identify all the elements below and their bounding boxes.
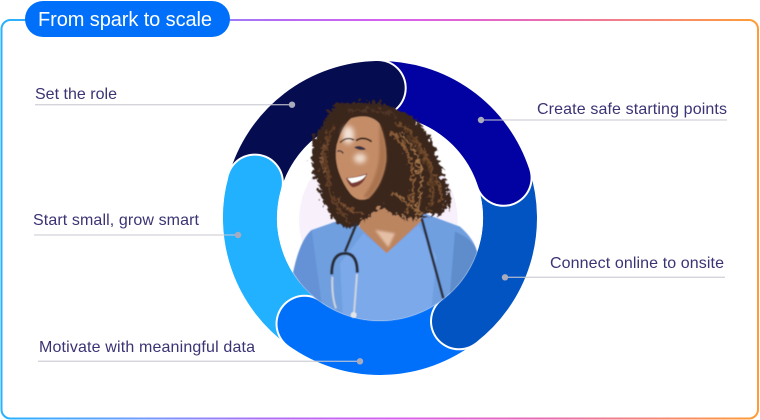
label: set the role [35, 86, 295, 108]
segment: create safe starting points [378, 88, 533, 207]
label: create safe starting points [478, 101, 727, 123]
label: create safe starting points: Create safe starting points [537, 101, 727, 118]
label: motivate with meaningful data: Motivate with meaningful data [39, 339, 255, 356]
segment: set the role [255, 59, 407, 183]
segment cap: start small, grow smart overlapping set the role [226, 154, 284, 218]
label: connect online to onsite [502, 255, 725, 280]
label: set the role: Set the role [35, 86, 117, 103]
ring chart: five overlapping segments [226, 59, 533, 353]
label: motivate with meaningful data [38, 339, 363, 364]
segment: connect online to onsite [430, 178, 510, 350]
title pill [25, 1, 230, 37]
title pill: From spark to scale [38, 9, 212, 31]
segment: start small, grow smart [250, 183, 305, 324]
label: connect online to onsite: Connect online to onsite [550, 255, 724, 272]
label: start small, grow smart: Start small, grow smart [33, 212, 200, 229]
photo: smiling nurse in blue scrubs [273, 99, 483, 330]
label: start small, grow smart [33, 212, 241, 238]
segment: motivate with meaningful data [276, 295, 460, 353]
